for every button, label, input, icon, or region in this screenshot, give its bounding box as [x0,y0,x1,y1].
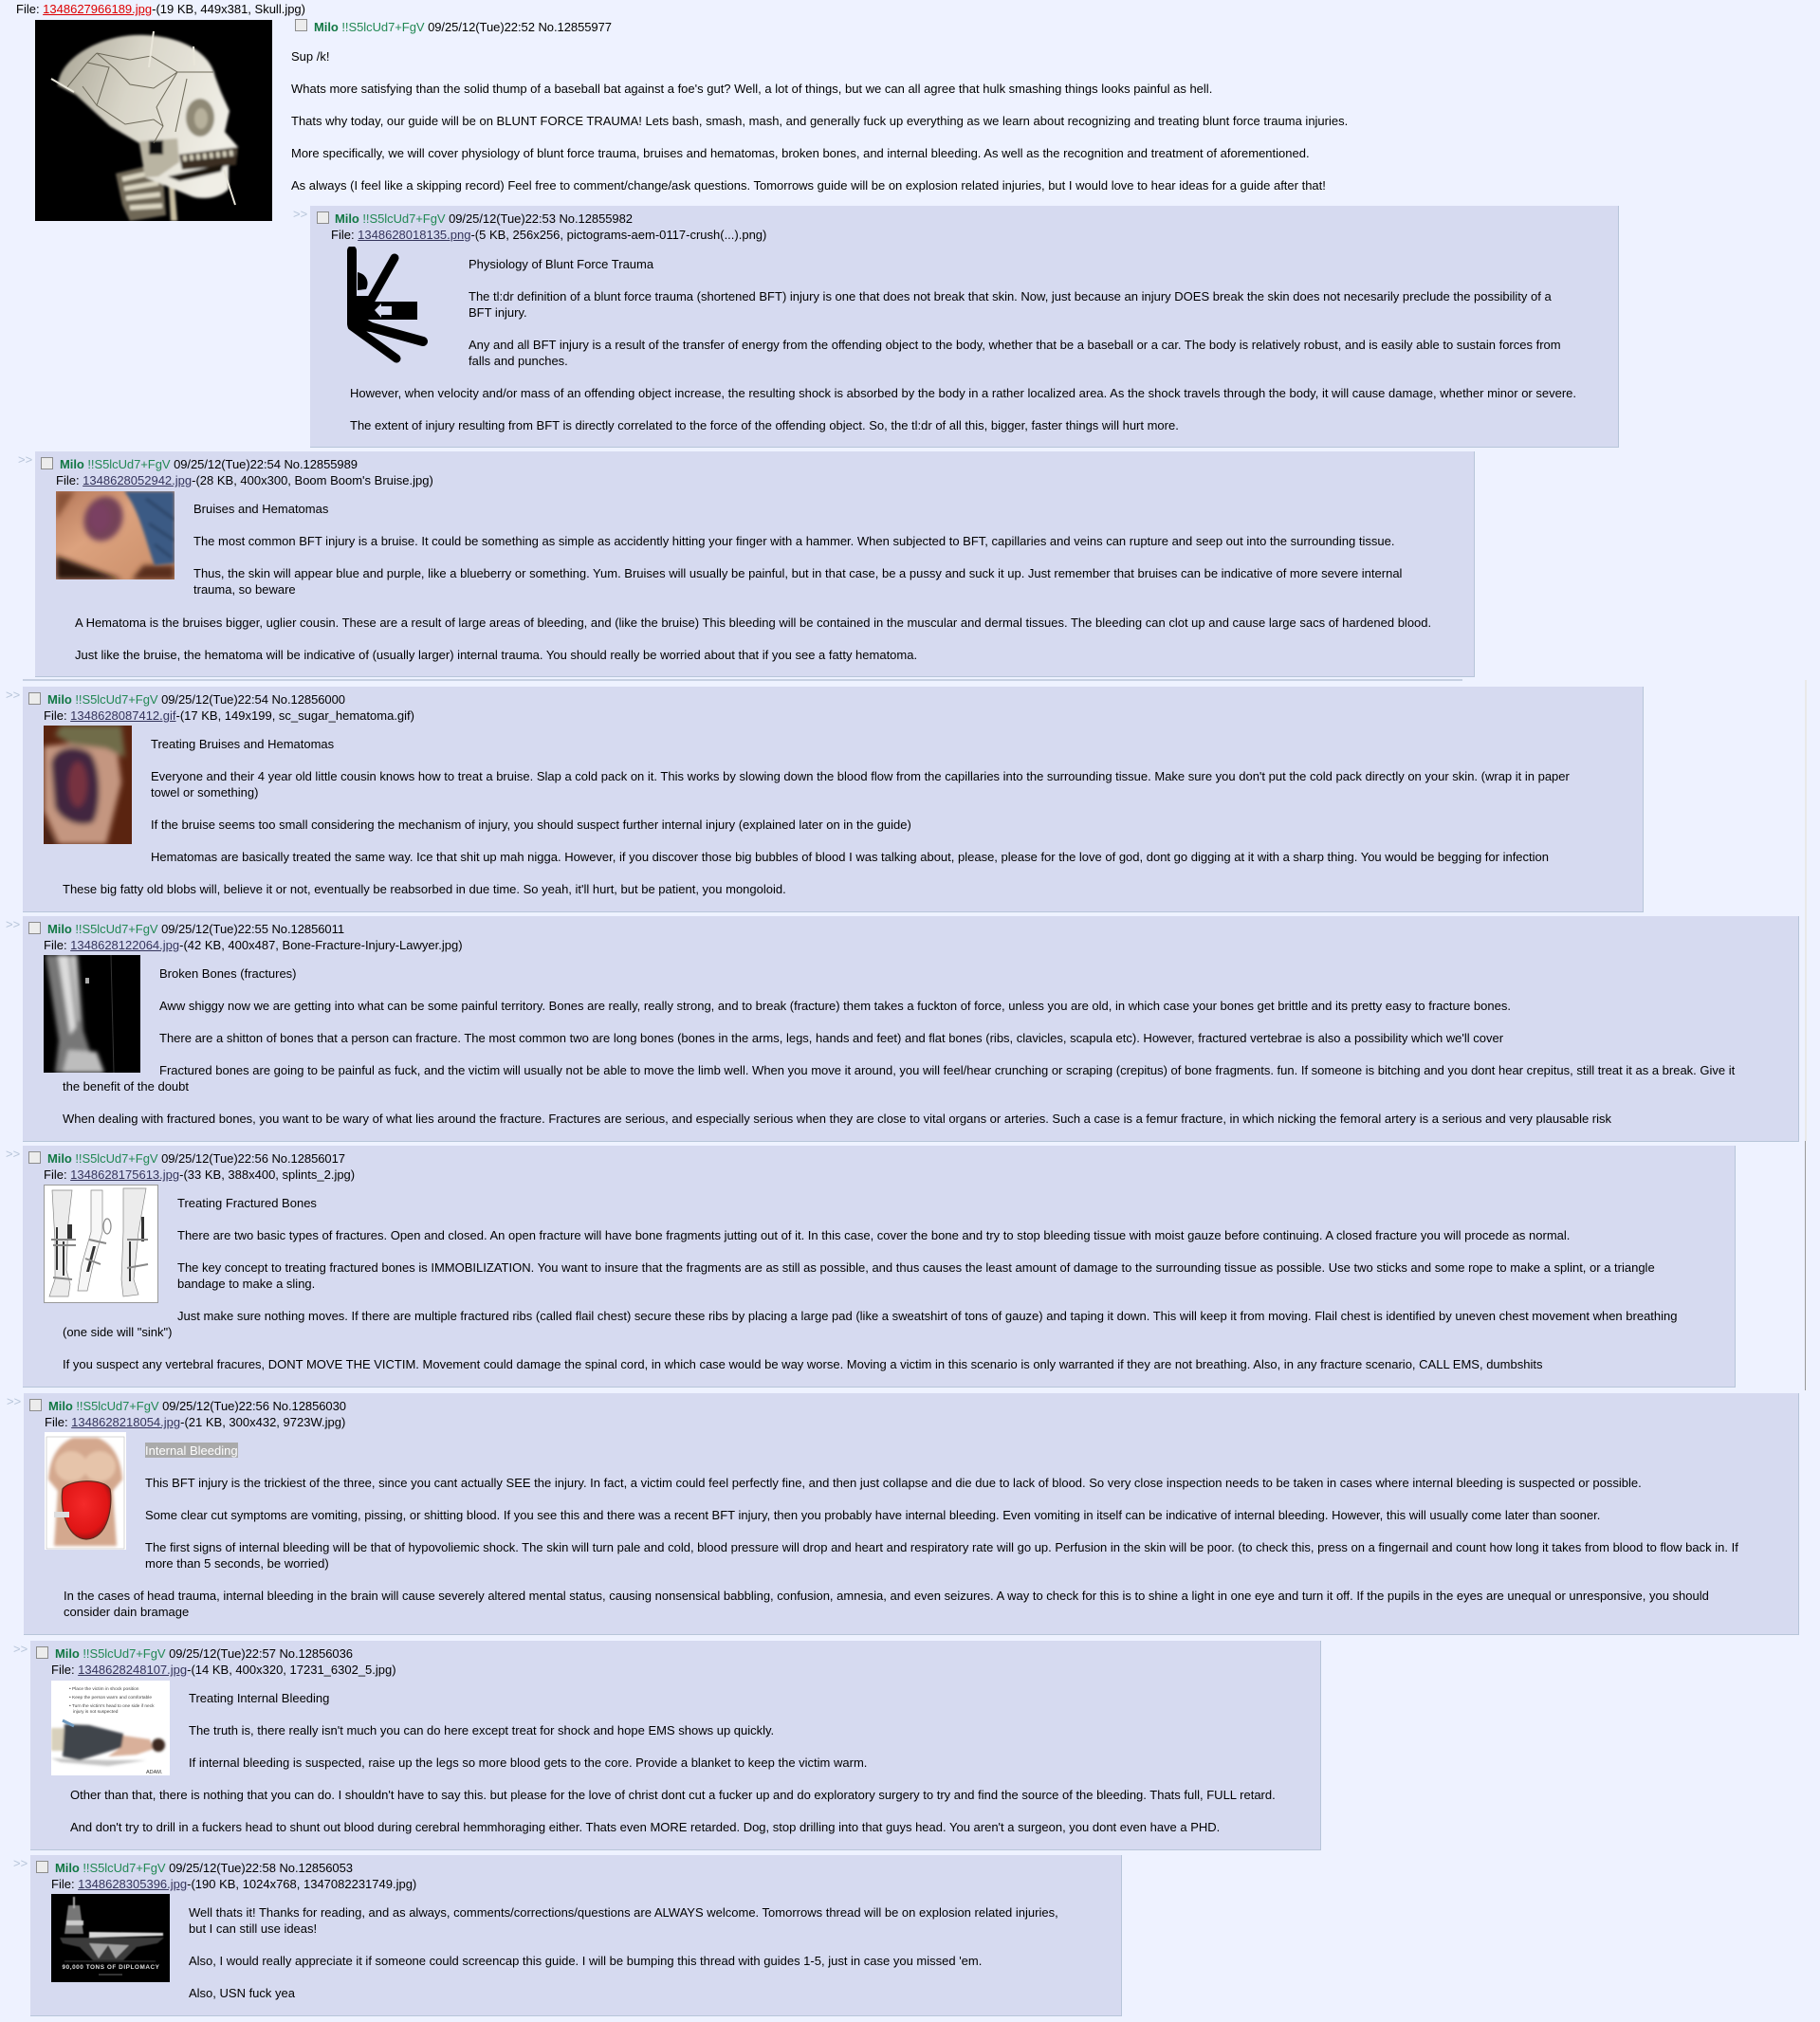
section heading: Treating Bruises and Hematomas [151,737,334,751]
paragraph: If you suspect any vertebral fracures, DONT MOVE THE VICTIM. Movement could damage the spinal cord, in which case would be way worse. Moving a victim in this scenario is only warranted if they are not breathing. Also, in any fracture scenario, CALL EMS, dumbshits [63,1357,1542,1371]
paragraph: However, when velocity and/or mass of an offending object increase, the resulting shock is absorbed by the body in a rather localized area. As the shock travels through the body, it will cause damage, whether minor or severe. [350,386,1576,400]
paragraph: BFT injury. [469,305,527,320]
decorative side line dark [1805,1141,1806,1390]
paragraph: trauma, so beware [193,582,296,597]
paragraph: Also, USN fuck yea [189,1986,295,2000]
intro heading: Sup /k! [291,49,329,64]
checkbox [29,1399,42,1411]
file info: File: 1348628018135.png-(5 KB, 256x256, pictograms-aem-0117-crush(...).png) [331,228,766,242]
paragraph continuation: the benefit of the doubt [63,1079,189,1094]
paragraph: These big fatty old blobs will, believe it or not, eventually be reabsorbed in due time. So yeah, it'll hurt, but be patient, you mongoloid. [63,882,786,896]
image: shock position illustration: • Turn the victim's head to one side if neck [69,1703,155,1709]
panel: broken bones [23,916,1799,1142]
paragraph: And don't try to drill in a fuckers head to shunt out blood during cerebral hemmhoraging either. Thats even MORE retarded. Dog, stop drilling into that guys head. You aren't a surgeon, you dont even have a PHD. [70,1820,1220,1834]
divider rule under bruises post [23,679,1462,681]
original post [16,2,1348,221]
post header: Milo !!S5lcUd7+FgV 09/25/12(Tue)22:57 No.12856036 [55,1646,353,1661]
panel: closing post [30,1855,1122,2016]
checkbox [36,1646,48,1659]
paragraph: Fractured bones are going to be painful as fuck, and the victim will usually not be able to move the limb well. When you move it around, you will feel/hear crunching or scraping (crepitus) of bone fragments. fun. If someone is bitching and you dont hear crepitus, still treat it as a break. Give it [159,1063,1735,1077]
paragraph [145,1540,1738,1571]
reply marker 5: >> [6,1147,20,1161]
file info: File: 1348628052942.jpg-(28 KB, 400x300, Boom Boom's Bruise.jpg) [56,473,433,487]
post header: Milo !!S5lcUd7+FgV 09/25/12(Tue)22:56 No.12856030 [48,1399,346,1413]
paragraph: but I can still use ideas! [189,1921,317,1936]
decorative side line light [1805,680,1807,1141]
reply marker 2: >> [18,452,32,467]
paragraph: There are two basic types of fractures. Open and closed. An open fracture will have bone fragments jutting out of it. In this case, cover the bone and try to stop bleeding tissue with moist gauze before continuing. A closed fracture you will procede as normal. [177,1228,1570,1242]
paragraph: The tl:dr definition of a blunt force trauma (shortened BFT) injury is one that does not break that skin. Now, just because an injury DOES break the skin does not necesarily preclude the possibility of a [469,289,1552,303]
reply marker 3: >> [6,688,20,702]
checkbox [28,1151,41,1164]
image: abdominal bleeding diagram [45,1432,126,1550]
section heading: Physiology of Blunt Force Trauma [469,257,653,271]
checkbox [28,922,41,934]
section heading: Broken Bones (fractures) [159,966,297,981]
paragraph: Also, I would really appreciate it if someone could screencap this guide. I will be bumping this thread with guides 1-5, just in case you missed 'em. [189,1954,982,1968]
section heading: Treating Internal Bleeding [189,1691,329,1705]
intro paragraph 4: As always (I feel like a skipping record) Feel free to comment/change/ask questions. Tomorrows guide will be on explosion related injuries, but I would love to hear ideas for a guide after that! [291,178,1326,193]
paragraph: The truth is, there really isn't much you can do here except treat for shock and hope EMS shows up quickly. [189,1723,774,1737]
paragraph: In the cases of head trauma, internal bleeding in the brain will cause severely altered mental status, causing nonsensical babbling, confusion, amnesia, and even seizures. A way to check for this is to shine a light in one eye and turn it off. If the pupils in the eyes are unequal or unresponsive, you should [64,1589,1709,1603]
image: leg x-ray [44,955,140,1073]
reply marker 4: >> [6,917,20,931]
paragraph [64,1589,1709,1619]
paragraph: consider dain bramage [64,1605,189,1619]
section heading: Bruises and Hematomas [193,502,328,516]
intro paragraph 3: More specifically, we will cover physiology of blunt force trauma, bruises and hematomas, broken bones, and internal bleeding. As well as the recognition and treatment of aforementioned. [291,146,1310,160]
image: shock position illustration [51,1681,170,1775]
paragraph: If the bruise seems too small considering the mechanism of injury, you should suspect further internal injury (explained later on in the guide) [151,818,911,832]
checkbox [36,1861,48,1873]
panel: bruises and hematomas [35,451,1475,677]
file info: File: 1348628218054.jpg-(21 KB, 300x432, 9723W.jpg) [45,1415,345,1429]
post header: Milo !!S5lcUd7+FgV 09/25/12(Tue)22:56 No.12856017 [47,1151,345,1166]
file info: File: 1348628087412.gif-(17 KB, 149x199, sc_sugar_hematoma.gif) [44,708,414,723]
intro paragraph 2: Thats why today, our guide will be on BLUNT FORCE TRAUMA! Lets bash, smash, mash, and generally fuck up everything as we learn about recognizing and treating blunt force trauma injuries. [291,114,1348,128]
paragraph [151,769,1570,800]
icon: crush pictogram [347,247,428,362]
highlighted section heading: Internal Bleeding [145,1443,238,1458]
paragraph: towel or something) [151,785,258,800]
paragraph [193,566,1402,597]
checkbox [317,211,329,224]
paragraph: The first signs of internal bleeding will be that of hypovoliemic shock. The skin will turn pale and cold, blood pressure will drop and heart and respiratory rate will go up. Perfusion in the skin will be poor. (to check this, press on a fingernail and count how long it takes from blood to flow back in. If [145,1540,1738,1554]
paragraph: A Hematoma is the bruises bigger, uglier cousin. These are a result of large areas of bleeding, and (like the bruise) This bleeding will be contained in the muscular and dermal tissues. The bleeding can clot up and cause large sacs of hardened blood. [75,616,1431,630]
image: aircraft carrier poster: 90,000 TONS OF DIPLOMACY [63,1964,160,1971]
post header: Milo !!S5lcUd7+FgV 09/25/12(Tue)22:53 No.12855982 [335,211,633,226]
paragraph: There are a shitton of bones that a person can fracture. The most common two are long bones (bones in the arms, legs, hands and feet) and flat bones (ribs, clavicles, scapula etc). However, fractured vertebrae is also a possibility which we'll cover [159,1031,1503,1045]
file info: File: 1348628175613.jpg-(33 KB, 388x400, splints_2.jpg) [44,1167,355,1182]
paragraph: Hematomas are basically treated the same way. Ice that shit up mah nigga. However, if you discover those big bubbles of blood I was talking about, please, please for the love of god, dont go digging at it with a sharp thing. You would be begging for infection [151,850,1549,864]
image: shock position illustration: • Keep the person warm and comfortable [69,1695,152,1700]
post header: Milo !!S5lcUd7+FgV 09/25/12(Tue)22:58 No.12856053 [55,1861,353,1875]
paragraph: Some clear cut symptoms are vomiting, pissing, or shitting blood. If you see this and there was a recent BFT injury, then you probably have internal bleeding. Even vomiting in itself can be indicative of internal bleeding. However, this will usually come later than sooner. [145,1508,1600,1522]
image: fractured skull CT scan [35,20,272,221]
paragraph: If internal bleeding is suspected, raise up the legs so more blood gets to the core. Provide a blanket to keep the victim warm. [189,1755,867,1770]
paragraph: falls and punches. [469,354,568,368]
post header [295,19,612,34]
checkbox [295,19,307,31]
paragraph: Just like the bruise, the hematoma will be indicative of (usually larger) internal trauma. You should really be worried about that if you see a fatty hematoma. [75,648,917,662]
paragraph: When dealing with fractured bones, you want to be wary of what lies around the fracture. Fractures are serious, and especially serious when they are close to vital organs or arteries. Such a case is a femur fracture, in which nicking the femoral artery is a serious and very plausable risk [63,1112,1611,1126]
paragraph: Everyone and their 4 year old little cousin knows how to treat a bruise. Slap a cold pack on it. This works by slowing down the blood flow from the capillaries into the surrounding tissue. Make sure you don't put the cold pack directly on your skin. (wrap it in paper [151,769,1570,783]
checkbox [28,692,41,705]
paragraph: The extent of injury resulting from BFT is directly correlated to the force of the offending object. So, the tl:dr of all this, bigger, faster things will hurt more. [350,418,1179,432]
image: shock position illustration: • Place the victim in shock position [69,1686,139,1692]
reply marker 8: >> [13,1856,28,1870]
paragraph: Just make sure nothing moves. If there are multiple fractured ribs (called flail chest) secure these ribs by placing a large pad (like a sweatshirt of tons of gauze) and taping it down. This will keep it from moving. Flail chest is identified by uneven chest movement when breathing [177,1309,1677,1323]
paragraph: Other than that, there is nothing that you can do. I shouldn't have to say this. but please for the love of christ dont cut a fucker up and do exploratory surgery to try and find the source of the bleeding. Thats full, FULL retard. [70,1788,1276,1802]
paragraph [469,289,1552,320]
reply marker 7: >> [13,1642,28,1656]
panel: treating bruises and hematomas [23,687,1644,912]
paragraph: Well thats it! Thanks for reading, and as always, comments/corrections/questions are ALWAYS welcome. Tomorrows thread will be on explosion related injuries, [189,1905,1058,1920]
paragraph: Thus, the skin will appear blue and purple, like a blueberry or something. Yum. Bruises will usually be painful, but in that case, be a pussy and suck it up. Just remember that bruises can be indicative of more severe internal [193,566,1402,580]
file info line: File: 1348627966189.jpg-(19 KB, 449x381, Skull.jpg) [16,2,305,16]
image: hematoma photo [44,726,132,844]
panel: treating fractured bones [23,1146,1736,1388]
checkbox [41,457,53,469]
panel: physiology of blunt force trauma [310,206,1619,448]
paragraph continuation: (one side will "sink") [63,1325,172,1339]
image: bruise photo [56,491,175,579]
paragraph [177,1260,1655,1291]
intro paragraph 1: Whats more satisfying than the solid thump of a baseball bat against a foe's gut? Well, a lot of things, but we can all agree that hulk smashing things looks painful as hell. [291,82,1212,96]
file info: File: 1348628122064.jpg-(42 KB, 400x487, Bone-Fracture-Injury-Lawyer.jpg) [44,938,463,952]
image: splint illustrations [44,1185,158,1303]
reply marker 6: >> [7,1394,21,1408]
reply marker 1: >> [293,207,307,221]
image: shock position illustration: injury is not suspected [73,1709,119,1715]
paragraph [469,338,1561,368]
section heading: Treating Fractured Bones [177,1196,317,1210]
author and date: Milo !!S5lcUd7+FgV 09/25/12(Tue)22:52 No.12855977 [314,20,612,34]
image: shock position illustration: ADAM. [146,1770,163,1775]
file info: File: 1348628305396.jpg-(190 KB, 1024x768, 1347082231749.jpg) [51,1877,416,1891]
post header: Milo !!S5lcUd7+FgV 09/25/12(Tue)22:55 No.12856011 [47,922,344,936]
post header: Milo !!S5lcUd7+FgV 09/25/12(Tue)22:54 No.12856000 [47,692,345,707]
paragraph: bandage to make a sling. [177,1277,315,1291]
image: aircraft carrier poster [51,1894,170,1982]
paragraph: Any and all BFT injury is a result of the transfer of energy from the offending object to the body, whether that be a baseball or a car. The body is relatively robust, and is easily able to sustain forces from [469,338,1561,352]
paragraph: The most common BFT injury is a bruise. It could be something as simple as accidently hitting your finger with a hammer. When subjected to BFT, capillaries and veins can rupture and seep out into the surrounding tissue. [193,534,1394,548]
panel: internal bleeding [24,1393,1799,1635]
paragraph: This BFT injury is the trickiest of the three, since you cant actually SEE the injury. In fact, a victim could feel perfectly fine, and then just collapse and die due to lack of blood. So very close inspection needs to be taken in cases where internal bleeding is suspected or possible. [145,1476,1642,1490]
file info: File: 1348628248107.jpg-(14 KB, 400x320, 17231_6302_5.jpg) [51,1663,396,1677]
paragraph [189,1905,1058,1936]
paragraph: Aww shiggy now we are getting into what can be some painful territory. Bones are really, really strong, and to break (fracture) them takes a fuckton of force, unless you are old, in which case your bones get brittle and its pretty easy to fracture bones. [159,999,1511,1013]
panel: treating internal bleeding [30,1641,1321,1850]
paragraph: more than 5 seconds, be worried) [145,1556,329,1571]
post header: Milo !!S5lcUd7+FgV 09/25/12(Tue)22:54 No.12855989 [60,457,358,471]
paragraph: The key concept to treating fractured bones is IMMOBILIZATION. You want to insure that the fragments are as still as possible, and thus causes the least amount of damage to the surrounding tissue as possible. Use two sticks and some rope to make a splint, or a triangle [177,1260,1655,1275]
